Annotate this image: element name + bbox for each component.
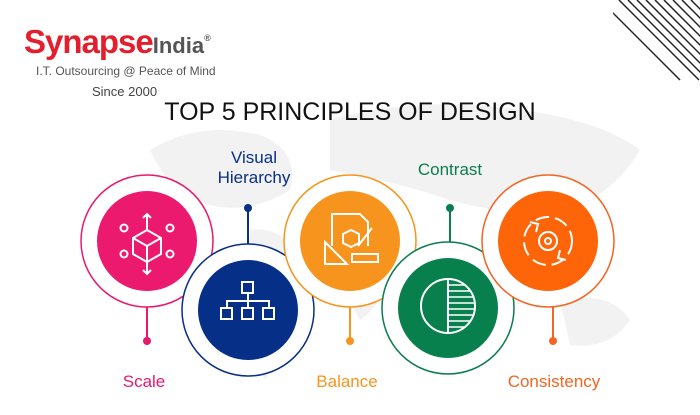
label: balance: Balance	[316, 372, 378, 391]
label: visual hierarchy: Visual	[231, 148, 277, 167]
label: visual hierarchy: Hierarchy	[218, 168, 290, 187]
label: consistency: Consistency	[508, 372, 600, 391]
item: scale	[81, 175, 213, 345]
label: scale: Scale	[123, 372, 165, 391]
logo: I.T. Outsourcing @ Peace of Mind	[36, 64, 216, 78]
label: contrast: Contrast	[418, 160, 482, 179]
item: consistency	[482, 175, 614, 345]
item: balance	[284, 175, 416, 345]
label: visual hierarchy	[218, 148, 290, 187]
logo: Since 2000	[92, 84, 157, 99]
item: visual hierarchy	[182, 204, 314, 376]
item: contrast	[382, 204, 514, 374]
logo: SynapseIndia®	[24, 23, 210, 60]
title: TOP 5 PRINCIPLES OF DESIGN	[164, 98, 536, 126]
background world map silhouette	[150, 0, 700, 380]
logo	[24, 23, 216, 99]
